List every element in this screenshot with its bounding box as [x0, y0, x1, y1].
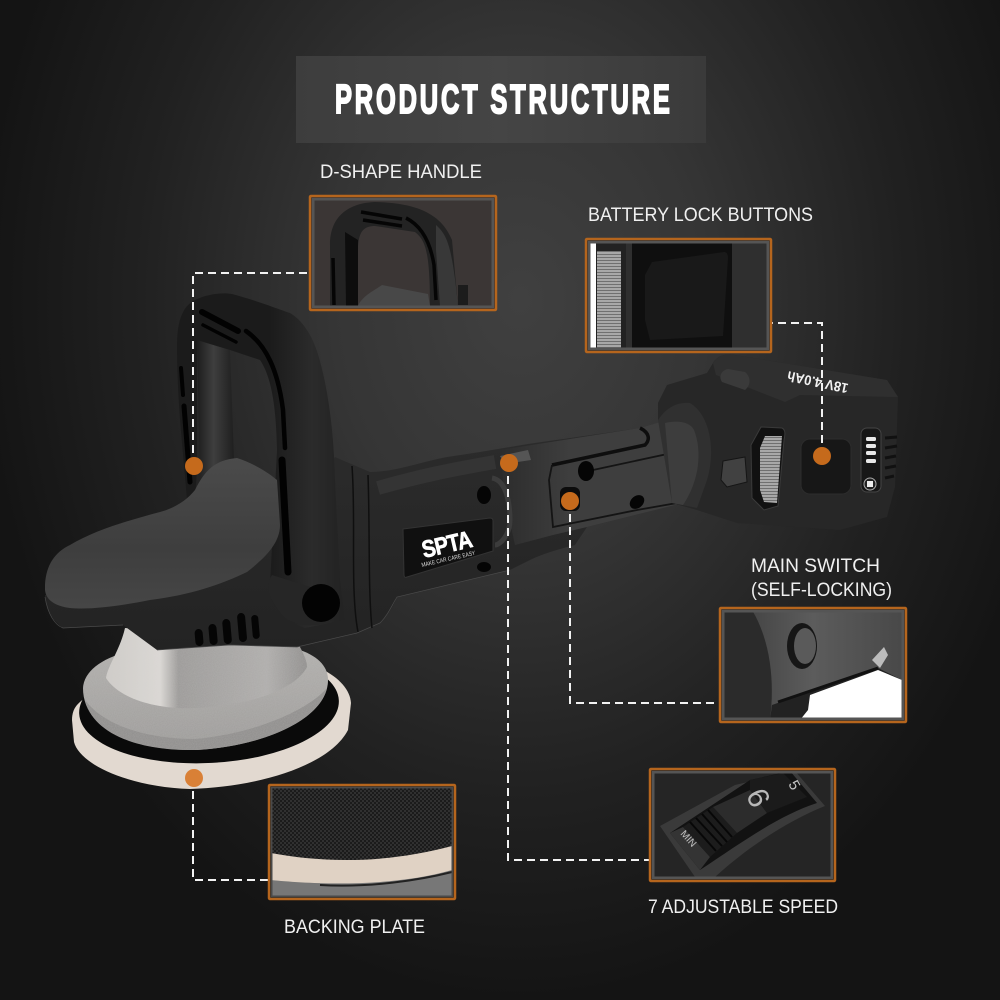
silver plate and cone [83, 628, 328, 750]
shaft [500, 420, 683, 545]
panel: backing plate [269, 785, 455, 899]
battery rating: 18V 4.0Ah [786, 368, 850, 397]
palm grip [45, 458, 280, 609]
handle pivot [268, 575, 340, 625]
label: adjustable speed: 7 ADJUSTABLE SPEED [648, 896, 838, 918]
leader lines [193, 273, 822, 880]
holes on the shaft [477, 461, 647, 572]
backing pad [72, 644, 351, 789]
label: main switch: MAIN SWITCH [751, 555, 880, 577]
battery lock button [801, 439, 851, 494]
panel: adjustable speed: 6 [739, 783, 776, 813]
D-shape handle [177, 293, 345, 628]
product: dual action polisher [45, 293, 898, 789]
panel: adjustable speed: MIN [678, 829, 698, 850]
panel: D-shape handle [310, 196, 496, 310]
charge indicator [861, 428, 881, 492]
handle slots [181, 312, 288, 572]
label: D-shape handle: D-SHAPE HANDLE [320, 161, 482, 183]
battery fins [885, 437, 897, 478]
brand plate [403, 518, 493, 577]
vents [194, 613, 260, 646]
side grille [751, 427, 785, 510]
panel: adjustable speed [650, 769, 835, 881]
label: main switch: (SELF-LOCKING) [751, 579, 892, 601]
side tab [721, 457, 747, 487]
brand plate: SPTA [419, 526, 475, 563]
panel: battery lock buttons [586, 239, 771, 352]
label: battery lock buttons: BATTERY LOCK BUTTONS [588, 204, 813, 226]
callout dots [185, 447, 831, 787]
title: PRODUCT STRUCTURE [335, 77, 670, 123]
battery head [658, 355, 898, 530]
panel: main switch [720, 608, 906, 722]
brand plate: MAKE CAR CARE EASY [421, 551, 476, 569]
panel: adjustable speed: 5 [785, 778, 803, 793]
label: main switch [751, 555, 892, 601]
motor and shaft body [45, 420, 683, 650]
far side of handle [197, 340, 234, 480]
label: backing plate: BACKING PLATE [284, 916, 425, 938]
title [296, 56, 706, 143]
